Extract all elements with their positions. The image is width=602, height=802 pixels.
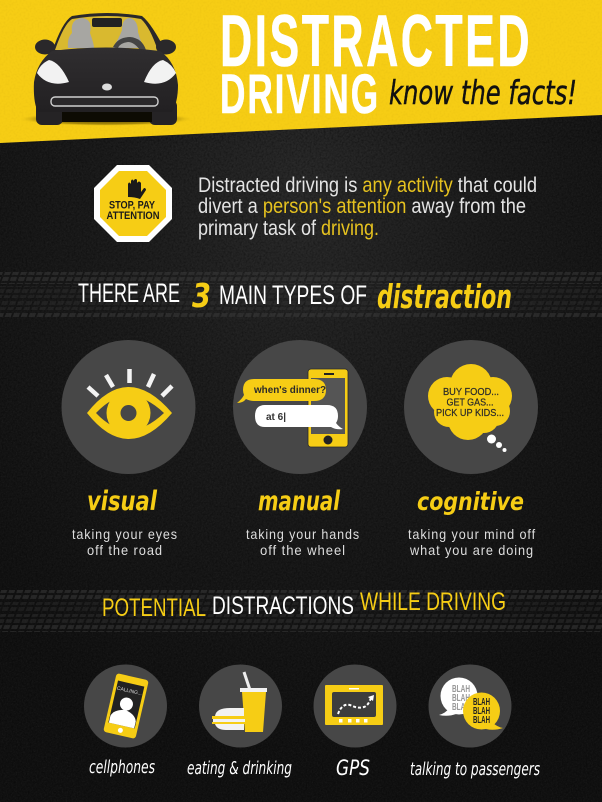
icon: white speech bubble: BLAH bbox=[452, 702, 470, 713]
description: cognitive bbox=[408, 526, 536, 558]
label: cellphones: cellphones bbox=[89, 757, 155, 778]
icon: phone bbox=[308, 369, 348, 447]
panel: talking to passengers bbox=[410, 664, 540, 780]
sign text: STOP, PAY bbox=[109, 200, 156, 212]
description: visual: off the road bbox=[87, 542, 163, 558]
badge bbox=[102, 84, 112, 90]
intro text: primary task of driving. bbox=[198, 217, 379, 240]
windshield bbox=[52, 13, 166, 52]
panel: manual bbox=[233, 340, 367, 558]
title: DRIVING bbox=[220, 62, 380, 125]
panel: GPS bbox=[314, 664, 396, 780]
description: visual: taking your eyes bbox=[72, 526, 178, 542]
panel: cellphones bbox=[84, 664, 167, 778]
mirrors bbox=[35, 40, 55, 54]
icon: yellow speech bubble bbox=[463, 692, 503, 730]
intro text: Distracted driving is any activity that could bbox=[198, 174, 537, 197]
speech bubble: question bbox=[237, 379, 326, 403]
speech bubble: answer bbox=[255, 405, 343, 429]
speech bubble: answer: at 6| bbox=[266, 412, 286, 423]
intro text: divert a person's attention away from the bbox=[198, 195, 526, 218]
heading: potential distractions bbox=[102, 588, 506, 622]
icon: thought cloud: BUY FOOD... bbox=[443, 386, 499, 398]
icon: yellow speech bubble: BLAH bbox=[473, 697, 490, 708]
label: manual: manual bbox=[258, 486, 341, 517]
icon: car bbox=[18, 13, 194, 126]
label: cognitive: cognitive bbox=[417, 487, 524, 516]
tyre tracks upper bbox=[0, 272, 602, 319]
tyre tracks lower bbox=[0, 590, 602, 632]
icon: eye bbox=[87, 369, 172, 439]
label: visual: visual bbox=[87, 486, 158, 517]
description: manual: taking your hands bbox=[246, 526, 360, 542]
icon: yellow speech bubble: BLAH bbox=[473, 715, 490, 726]
icon: thought cloud bbox=[428, 364, 512, 452]
title bbox=[220, 1, 532, 125]
heading: three types bbox=[78, 276, 512, 316]
icon: stop sign bbox=[94, 165, 172, 242]
icon: white speech bubble bbox=[439, 678, 478, 716]
panel: eating and drinking bbox=[187, 664, 292, 779]
heading: potential distractions: POTENTIAL bbox=[102, 594, 206, 622]
heading: three types: THERE ARE bbox=[78, 278, 180, 308]
description: visual bbox=[72, 526, 178, 558]
heading: potential distractions: DISTRACTIONS bbox=[212, 592, 354, 620]
headlights bbox=[37, 60, 69, 84]
grille bbox=[51, 97, 158, 106]
header banner bbox=[0, 0, 602, 143]
heading: three types: distraction bbox=[377, 277, 512, 316]
icon: thought cloud: GET GAS... bbox=[446, 396, 494, 408]
icon: yellow speech bubble: BLAH bbox=[473, 706, 490, 717]
description: manual bbox=[246, 526, 360, 558]
label: eating and drinking: eating & drinking bbox=[187, 758, 292, 779]
body bbox=[34, 48, 178, 112]
panel: cognitive bbox=[404, 340, 538, 558]
icon: calling phone: CALLING... bbox=[116, 686, 143, 697]
description: cognitive: what you are doing bbox=[409, 542, 534, 558]
intro text bbox=[198, 174, 537, 240]
heading: three types: MAIN TYPES OF bbox=[219, 280, 367, 310]
icon: white speech bubble: BLAH bbox=[452, 684, 470, 695]
icon: GPS device bbox=[325, 685, 383, 725]
heading: three types: 3 bbox=[192, 276, 211, 315]
description: cognitive: taking your mind off bbox=[408, 526, 536, 542]
icon: burger and drink bbox=[212, 672, 267, 732]
icon: thought cloud: PICK UP KIDS... bbox=[436, 407, 504, 419]
sign text bbox=[106, 200, 160, 222]
panel: visual bbox=[62, 340, 196, 558]
heading: potential distractions: WHILE DRIVING bbox=[360, 588, 506, 616]
description: manual: off the wheel bbox=[260, 542, 346, 558]
wheels bbox=[36, 100, 63, 125]
speech bubble: question: when's dinner? bbox=[253, 385, 326, 396]
sign text: ATTENTION bbox=[106, 210, 160, 222]
icon: white speech bubble: BLAH bbox=[452, 693, 470, 704]
label: talking to passengers: talking to passengers bbox=[410, 759, 540, 780]
label: GPS: GPS bbox=[336, 756, 370, 780]
icon: hand bbox=[128, 179, 146, 199]
